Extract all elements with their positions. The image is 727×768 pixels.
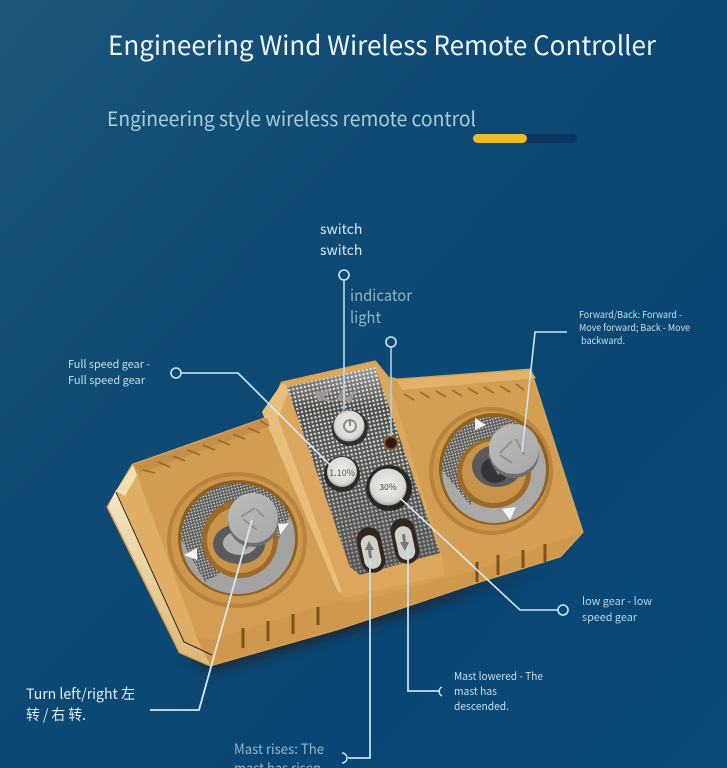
callout: full speed gear: Full speed gear - (68, 356, 150, 372)
callout: mast rises: Mast rises: The (234, 739, 324, 759)
callout: indicator light: indicator (350, 282, 413, 306)
callout: indicator light (350, 282, 413, 436)
controller illustration (108, 362, 582, 672)
callout: switch (320, 219, 362, 410)
mast up button (354, 525, 388, 575)
callout: mast lowered: mast has (454, 683, 497, 699)
callout: turn left and right: 转 / 右 转. (26, 704, 86, 725)
top edge highlight (397, 370, 536, 390)
power button (332, 410, 368, 446)
low speed button (366, 465, 412, 511)
centre panel (262, 362, 445, 598)
callout: switch: switch (320, 240, 362, 260)
logo mark (314, 388, 357, 402)
front lip (195, 532, 582, 665)
callout: mast lowered: descended. (454, 698, 509, 714)
low speed button: 30% (379, 481, 397, 493)
full speed button: 1.10% (329, 466, 355, 479)
callout: full speed gear (68, 356, 330, 465)
callout: low speed gear: low gear - low (582, 593, 652, 609)
callout: low speed gear (400, 498, 652, 625)
callout: mast lowered: Mast lowered - The (454, 668, 543, 684)
callout: full speed gear: Full speed gear (68, 372, 146, 388)
callout: switch: switch (320, 219, 362, 239)
callout: turn left and right: Turn left/right 左 (26, 683, 135, 704)
title: Engineering Wind Wireless Remote Controller (108, 24, 657, 63)
right joystick (429, 407, 553, 535)
callout: turn left and right (26, 520, 252, 725)
controller body (108, 362, 582, 665)
grip ribs (243, 544, 545, 648)
indicator lamp (384, 436, 398, 450)
callout: mast rises (234, 560, 370, 768)
callout: forward and back (522, 307, 690, 452)
cream edge strip (108, 490, 212, 665)
left bevel (116, 465, 212, 652)
control plate (287, 367, 440, 575)
callout: indicator light: light (350, 304, 381, 328)
callout: low speed gear: speed gear (582, 609, 638, 625)
callout: forward and back: Move forward; Back - Move (579, 320, 690, 334)
left joystick (167, 472, 307, 608)
tread marks (143, 384, 524, 473)
controller shadow (180, 566, 550, 672)
full speed button (324, 456, 360, 492)
mast down button (388, 516, 422, 566)
progress bar (473, 134, 577, 143)
callout: mast lowered (408, 548, 543, 714)
callout: forward and back: Forward/Back: Forward - (579, 307, 682, 321)
subtitle: Engineering style wireless remote control (107, 103, 476, 132)
callout: forward and back: backward. (581, 333, 625, 347)
